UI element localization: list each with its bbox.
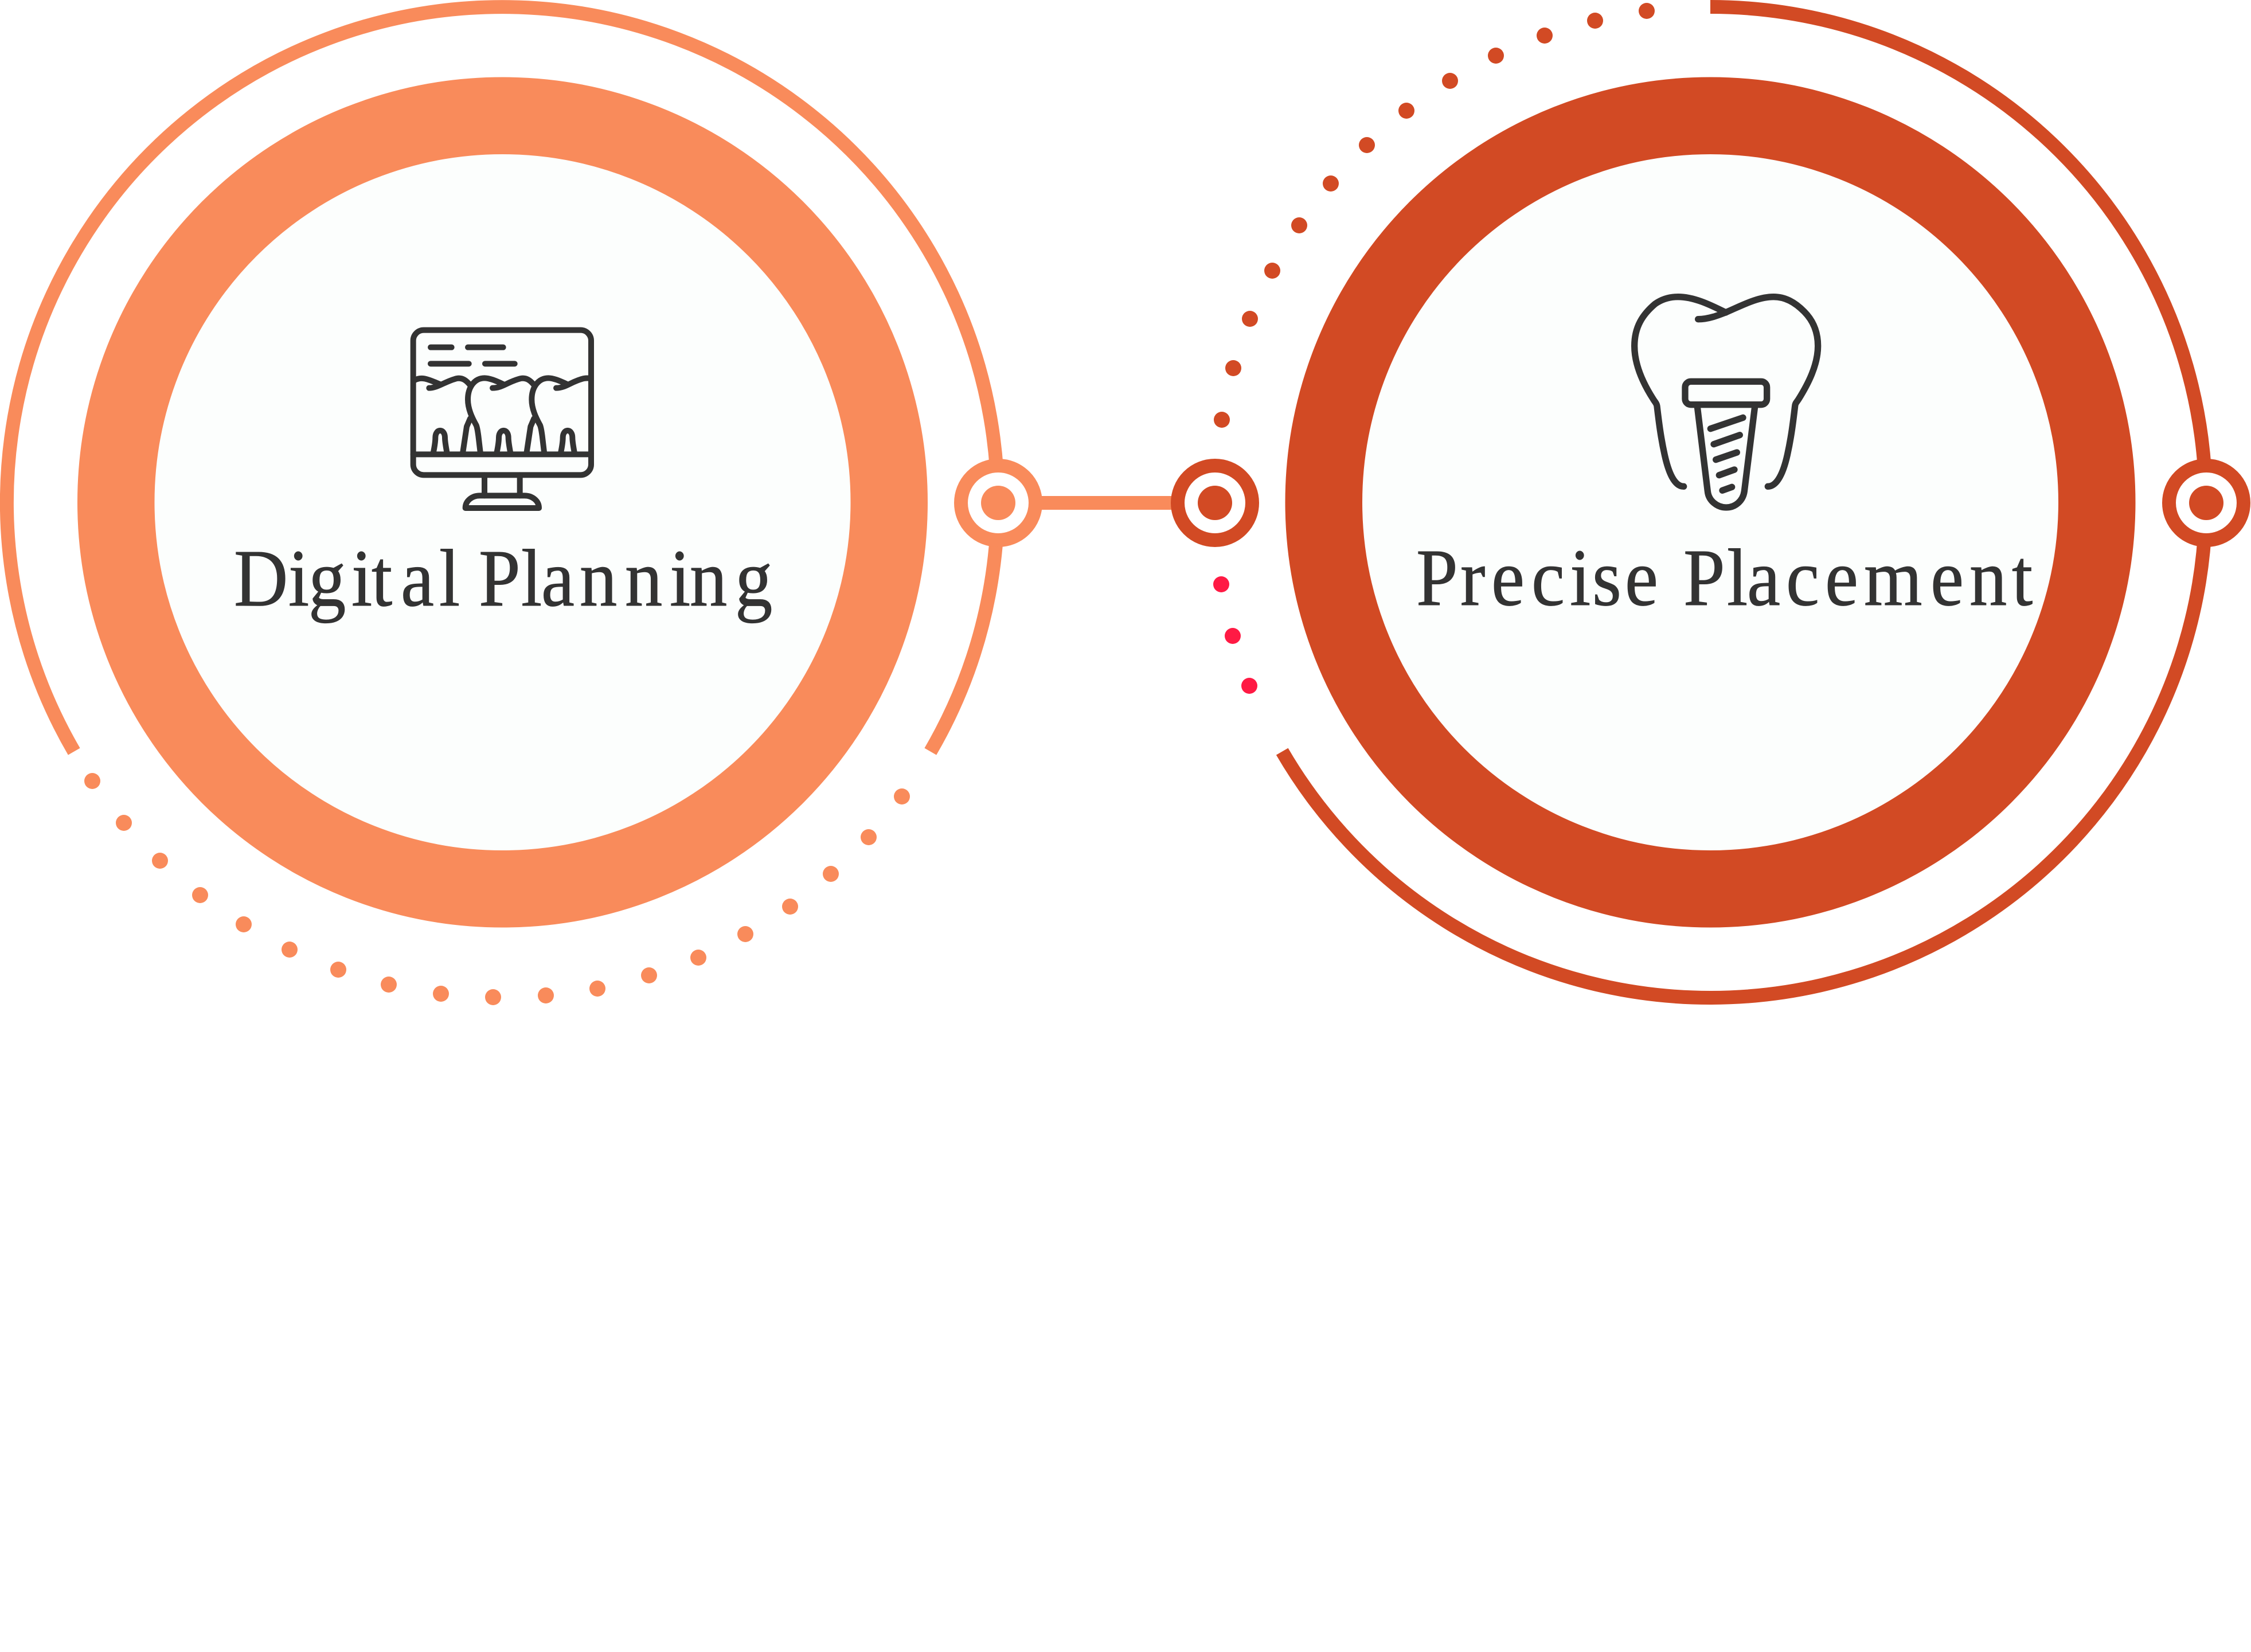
heading: Precise Placement: Precise Placement <box>1416 532 2033 623</box>
heading: Digital Planning: Digital Planning <box>234 533 772 623</box>
outer arc: precise placement <box>1282 7 2206 998</box>
panel: precise placement <box>1178 3 2244 998</box>
dotted arc: digital planning <box>84 773 910 1005</box>
icon: tooth with implant <box>1635 297 1818 507</box>
node: digital planning connector <box>961 466 1035 540</box>
red dots below connector <box>1213 576 1257 694</box>
outer arc: digital planning <box>7 7 998 752</box>
connector bar between steps <box>998 496 1215 510</box>
dotted arc: precise placement <box>1214 3 1655 428</box>
panel: digital planning <box>7 7 1035 1005</box>
node: precise placement entry <box>1178 466 1252 540</box>
node: precise placement exit <box>2169 466 2244 540</box>
icon: monitor with teeth <box>413 330 591 508</box>
thick ring with inner disc: precise placement <box>1324 116 2097 889</box>
thick ring with inner disc: digital planning <box>116 116 889 889</box>
